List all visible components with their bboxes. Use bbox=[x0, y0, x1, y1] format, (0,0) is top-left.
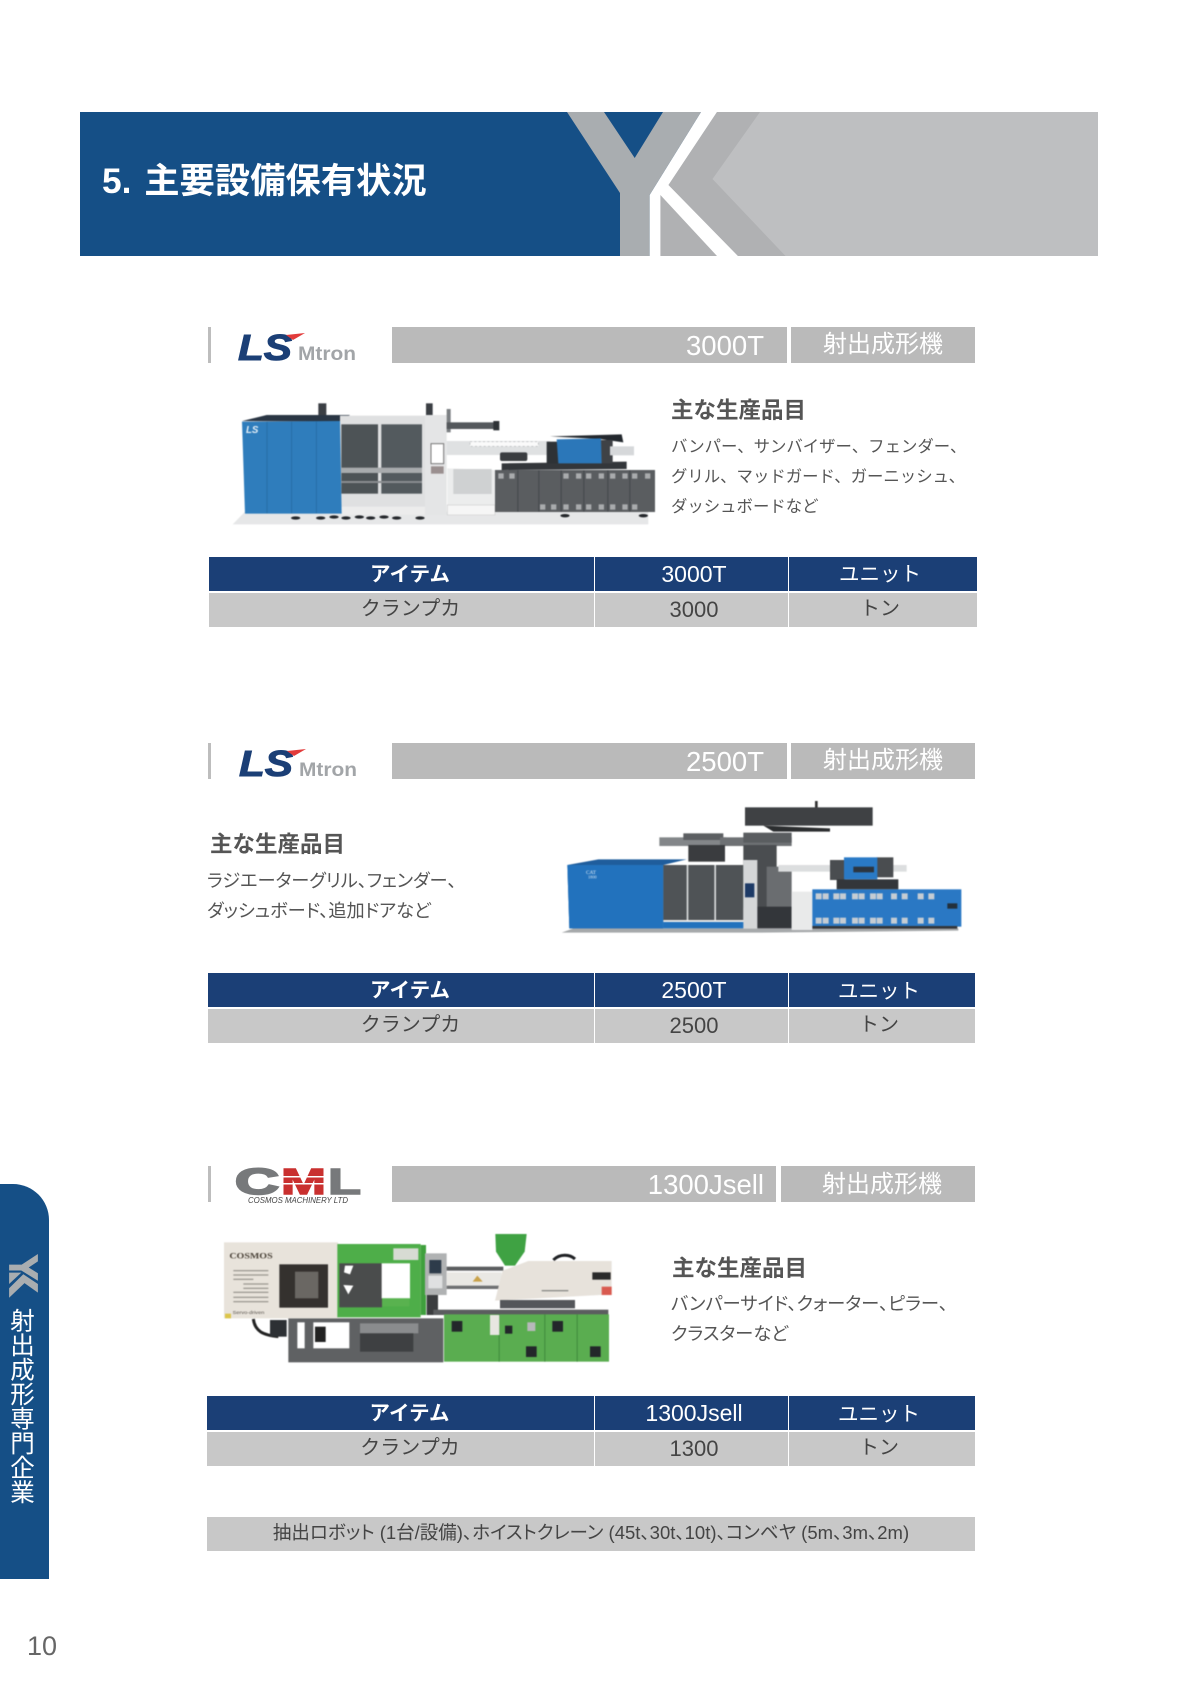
heading: main products: 主な生産品目 bbox=[210, 832, 345, 857]
heading: main products: 主な生産品目 bbox=[672, 1256, 807, 1281]
product list: ダッシュボード、追加ドアなど bbox=[207, 901, 431, 921]
product list: ラジエーターグリル、フェンダー、 bbox=[207, 871, 456, 891]
text block: main products 2500T bbox=[207, 832, 456, 921]
header cell: item bbox=[209, 557, 594, 591]
logo: LS Mtron 3000T: LS bbox=[238, 327, 292, 368]
heading: main products: 主な生産品目 bbox=[671, 398, 806, 423]
type bar: injection molding machine: 射出成形機 bbox=[822, 1171, 942, 1198]
model bar: 1300Jsell bbox=[392, 1166, 776, 1202]
note bar: auxiliary equipment bbox=[207, 1517, 975, 1551]
row unit: ton: トン bbox=[860, 598, 900, 620]
logo: CML Cosmos Machinery: M bbox=[281, 1161, 326, 1202]
logo: CML Cosmos Machinery: L bbox=[328, 1161, 361, 1202]
divider mark: 3000T bbox=[208, 327, 211, 363]
type bar: injection molding machine bbox=[791, 327, 975, 363]
title: 5. 主要設備保有状況 bbox=[102, 162, 427, 201]
row value: 2500: 2500 bbox=[670, 1013, 718, 1038]
type bar: injection molding machine: 射出成形機 bbox=[823, 331, 943, 358]
model bar: 2500T: 2500T bbox=[686, 746, 764, 777]
row value: 1300 bbox=[595, 1432, 788, 1466]
header cell: item: アイテム bbox=[370, 563, 450, 586]
machine image: 1300Jsell Cosmos: Servo-driven bbox=[233, 1310, 265, 1315]
row value: 2500 bbox=[595, 1009, 788, 1043]
row label: clamp force bbox=[209, 593, 594, 627]
row unit: ton bbox=[789, 1432, 975, 1466]
model bar: 1300Jsell: 1300Jsell bbox=[648, 1169, 764, 1200]
row unit: ton bbox=[789, 593, 977, 627]
logo: LS Mtron 3000T: Mtron bbox=[298, 344, 356, 365]
note bar: auxiliary equipment: 抽出ロボット (1台/設備)、ホイストクレーン (45t、30t、10t)、コンベヤ (5m、3m、2m) bbox=[273, 1522, 909, 1543]
product list bbox=[671, 438, 966, 516]
logo: CML Cosmos Machinery: COSMOS MACHINERY LTD bbox=[248, 1196, 348, 1205]
machine image: 1300Jsell Cosmos bbox=[224, 1233, 612, 1364]
model bar: 3000T: 3000T bbox=[686, 330, 764, 361]
header cell: unit bbox=[789, 973, 975, 1007]
product list bbox=[207, 871, 456, 921]
row unit: ton: トン bbox=[859, 1437, 899, 1459]
row label: clamp force bbox=[207, 1432, 594, 1466]
table: 2500T bbox=[208, 973, 975, 1043]
table: 3000T bbox=[209, 557, 977, 627]
header cell: model bbox=[595, 557, 788, 591]
header cell: model: 1300Jsell bbox=[645, 1400, 743, 1426]
vertical label: 射出成形専門企業 bbox=[7, 1308, 34, 1504]
header cell: unit: ユニット bbox=[838, 980, 920, 1003]
row label: clamp force: クランプカ bbox=[361, 598, 460, 620]
row unit: ton: トン bbox=[859, 1014, 899, 1036]
logo: CML Cosmos Machinery bbox=[235, 1161, 361, 1205]
machine image: 3000T LS bbox=[233, 402, 656, 524]
header cell: item: アイテム bbox=[370, 1402, 449, 1425]
table: 1300Jsell bbox=[207, 1396, 975, 1466]
row value: 3000 bbox=[595, 593, 788, 627]
row label: clamp force: クランプカ bbox=[360, 1437, 460, 1459]
text block: main products 3000T bbox=[671, 398, 966, 516]
model bar: 3000T bbox=[392, 327, 787, 363]
header cell: model: 2500T bbox=[661, 977, 727, 1003]
row value: 1300: 1300 bbox=[670, 1436, 718, 1461]
icon: YK logo rotated bbox=[9, 1254, 38, 1298]
page number: 10 bbox=[27, 1631, 57, 1661]
divider mark: 1300Jsell bbox=[208, 1166, 211, 1202]
row label: clamp force: クランプカ bbox=[361, 1014, 460, 1036]
product list bbox=[671, 1293, 948, 1344]
machine image: 2500T LS: 1800 bbox=[588, 875, 597, 880]
header banner bbox=[80, 112, 1098, 256]
header cell: item: アイテム bbox=[370, 979, 450, 1002]
type bar: injection molding machine bbox=[781, 1166, 975, 1202]
text block: main products 1300Jsell bbox=[671, 1256, 948, 1344]
divider mark: 2500T bbox=[208, 743, 211, 779]
machine image: 3000T LS: LS bbox=[246, 425, 259, 436]
machine image: 1300Jsell Cosmos: COSMOS bbox=[229, 1251, 273, 1260]
row label: clamp force bbox=[208, 1009, 594, 1043]
row value: 3000: 3000 bbox=[670, 597, 718, 622]
header cell: model bbox=[595, 1396, 788, 1430]
header cell: item bbox=[208, 973, 594, 1007]
header cell: unit: ユニット bbox=[838, 1403, 920, 1426]
header cell: item bbox=[207, 1396, 594, 1430]
row unit: ton bbox=[789, 1009, 975, 1043]
product list: クラスターなど bbox=[671, 1323, 788, 1344]
header cell: unit bbox=[789, 1396, 975, 1430]
product list: グリル、マッドガード、ガーニッシュ、 bbox=[671, 468, 965, 486]
logo: CML Cosmos Machinery: C bbox=[235, 1161, 279, 1202]
header cell: unit bbox=[789, 557, 977, 591]
machine image: 2500T LS: CAT bbox=[586, 870, 597, 876]
logo: LS Mtron 2500T: LS bbox=[239, 743, 293, 784]
product list: バンパー、サンバイザー、フェンダー、 bbox=[671, 438, 966, 456]
logo: LS Mtron 2500T bbox=[239, 743, 357, 784]
side tab bbox=[0, 1184, 49, 1579]
header cell: model: 3000T bbox=[661, 561, 727, 587]
model bar: 2500T bbox=[392, 743, 787, 779]
product list: バンパーサイド、クォーター、ピラー、 bbox=[671, 1293, 948, 1314]
logo: LS Mtron 2500T: Mtron bbox=[299, 760, 357, 781]
product list: ダッシュボードなど bbox=[671, 498, 819, 516]
type bar: injection molding machine bbox=[791, 743, 975, 779]
type bar: injection molding machine: 射出成形機 bbox=[823, 747, 943, 774]
header cell: unit: ユニット bbox=[839, 563, 921, 586]
machine image: 2500T LS bbox=[562, 800, 962, 934]
logo: LS Mtron 3000T bbox=[238, 327, 356, 368]
header cell: model bbox=[595, 973, 788, 1007]
